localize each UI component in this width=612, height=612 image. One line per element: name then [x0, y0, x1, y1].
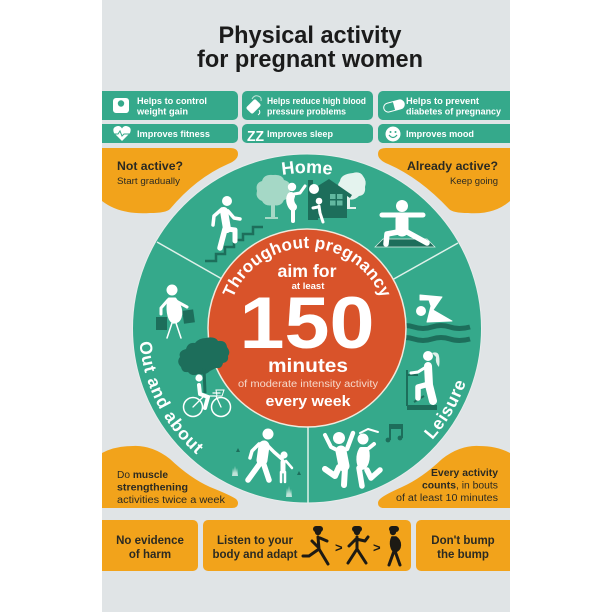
icon: music notes [386, 424, 403, 442]
benefit: mood [378, 124, 510, 143]
benefit: blood pressure: pressure problems [267, 106, 346, 116]
benefit: control weight gain: weight gain [136, 106, 188, 116]
benefit: control weight gain: Helps to control [137, 96, 207, 106]
icon: scale [113, 98, 129, 113]
title: Physical activity [218, 22, 402, 49]
benefit: sleep [242, 124, 373, 145]
callout: muscle strengthening: strengthening [117, 482, 188, 494]
callout: every activity counts: counts, in bouts [422, 480, 498, 492]
icon: family at home with trees [257, 172, 366, 222]
callout: muscle strengthening: activities twice a week [117, 495, 226, 506]
curved text: Throughout pregnancy [222, 236, 390, 296]
callout: already active: Keep going [450, 176, 498, 186]
icon: run, walk, pregnant walk: > [373, 540, 381, 555]
callout: every activity counts [378, 446, 510, 508]
icon: person climbing stairs [205, 196, 263, 261]
box: listen to your body [203, 520, 411, 571]
callout: every activity counts: Every activity [431, 468, 498, 479]
moderate intensity: of moderate intensity activity [238, 379, 378, 390]
box: no evidence of harm: of harm [129, 549, 171, 561]
benefit: fitness [102, 124, 238, 143]
benefit: diabetes: diabetes of pregnancy [406, 106, 501, 116]
callout: muscle strengthening: Do muscle [117, 470, 168, 481]
background panel [102, 0, 510, 612]
benefit: fitness: Improves fitness [137, 129, 210, 139]
icon: woman on stepper [407, 351, 440, 410]
callout: already active: Already active? [407, 161, 498, 173]
aim for: aim for [278, 261, 337, 281]
icon: swimmer and waves [396, 295, 470, 340]
callout: not active: Not active? [117, 161, 183, 173]
callout: not active [102, 148, 238, 213]
icon: heart [113, 126, 131, 141]
box: listen to your body: body and adapt [213, 549, 298, 561]
icon: smiley [386, 126, 400, 142]
box: don't bump the bump: Don't bump [431, 535, 495, 547]
benefit: diabetes: Helps to prevent [406, 96, 479, 106]
icon: pill [382, 98, 406, 114]
title [197, 22, 423, 73]
at least: at least [292, 281, 325, 292]
icon: woman with shopping bags [156, 284, 195, 338]
box: listen to your body: Listen to your [217, 535, 294, 547]
icon: blood pressure cuff [246, 96, 261, 115]
label: Home: Home [282, 161, 332, 175]
callout: muscle strengthening [102, 446, 238, 508]
every week: every week [266, 394, 352, 410]
activity wheel [133, 154, 481, 503]
minutes: minutes [268, 356, 348, 377]
icon: dancing friends [325, 429, 380, 486]
icon: run, walk, pregnant walk: > [335, 540, 343, 555]
icon: ZZ: ZZ [247, 128, 264, 145]
benefit: control weight gain [102, 91, 238, 120]
benefit: blood pressure: Helps reduce high blood [267, 96, 366, 106]
box: don't bump the bump: the bump [437, 549, 489, 561]
label: Out and about: Out and about [140, 342, 203, 454]
box: no evidence of harm: No evidence [116, 535, 184, 547]
benefit: blood pressure [242, 91, 373, 120]
box: don't bump the bump [416, 520, 510, 571]
icon: cyclist under tree [178, 337, 230, 416]
benefit: mood: Improves mood [406, 129, 474, 139]
benefit: sleep: Improves sleep [267, 129, 334, 139]
callout: not active: Start gradually [117, 176, 181, 186]
callout: every activity counts: of at least 10 minutes [396, 493, 498, 504]
box: no evidence of harm [102, 520, 198, 571]
150: 150 [240, 283, 374, 364]
callout: already active [378, 148, 510, 213]
box: centre circle [207, 228, 407, 428]
benefit: diabetes [378, 91, 510, 120]
icon: run, walk, pregnant walk [303, 526, 400, 565]
icon: adult walking with child [232, 428, 301, 497]
title: for pregnant women [197, 46, 423, 73]
label: Leisure: Leisure [424, 381, 465, 440]
icon: yoga pose [375, 200, 435, 247]
